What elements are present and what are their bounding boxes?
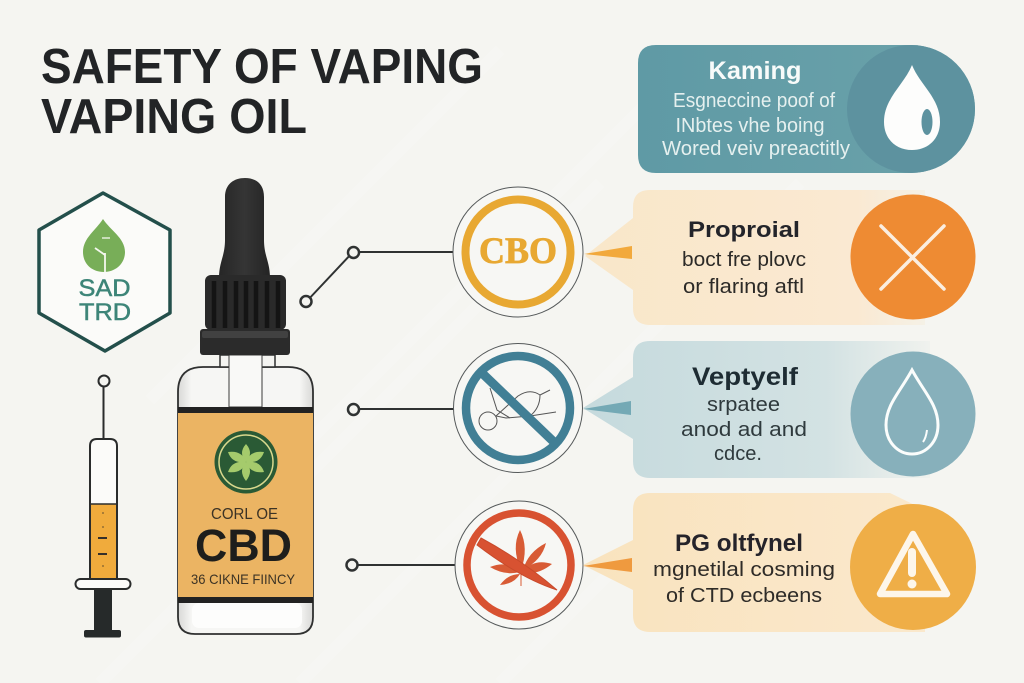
panel: PG oltfynel (583, 493, 976, 632)
title (41, 40, 483, 144)
panel: Veptyelf: Veptyelf (692, 363, 799, 391)
icon: outlined drop (850, 352, 976, 476)
title: VAPING OIL (41, 90, 307, 144)
label: CORL OE (211, 506, 278, 523)
syringe (76, 376, 130, 638)
panel: PG oltfynel: of CTD ecbeens (666, 585, 822, 607)
panel: Kaming: Wored veiv preactitly (662, 138, 850, 160)
panel: Proproial: Proproial (688, 217, 800, 242)
icon: green leaf drop (83, 219, 125, 272)
icon: CBO circle (453, 187, 583, 317)
badge: hexagon SAD TRD: SAD (78, 275, 130, 302)
panel: Kaming: INbtes vhe boing (676, 115, 824, 137)
badge: hexagon SAD TRD: TRD (79, 299, 131, 326)
icon: white drop (847, 45, 975, 173)
panel: PG oltfynel: mgnetilal cosming (653, 559, 835, 581)
title: SAFETY OF VAPING (41, 40, 483, 94)
icon: prohibited cannabis circle (455, 501, 583, 629)
panel: Veptyelf: anod ad and (681, 419, 807, 441)
label: CBD (195, 520, 292, 571)
bottle glass (178, 367, 313, 634)
icon: prohibited vaping circle (454, 344, 582, 472)
dropper bulb (219, 178, 270, 278)
panel: Veptyelf: srpatee (707, 394, 780, 416)
badge: hexagon SAD TRD (39, 193, 170, 351)
panel: Kaming: Kaming (708, 57, 802, 85)
connector: bottle to CBO (300, 247, 453, 307)
panel: Proproial: boct fre plovc (682, 249, 806, 271)
panel: PG oltfynel: PG oltfynel (675, 530, 803, 557)
panel: Proproial: or flaring aftl (683, 276, 804, 298)
panel: Kaming (638, 45, 975, 173)
connector: bottle to no-vape (348, 404, 454, 415)
icon: CBO circle: CBO (479, 231, 557, 272)
panel: Veptyelf: cdce. (714, 443, 762, 465)
panel: Veptyelf (583, 341, 976, 478)
connector: bottle to no-cannabis (346, 560, 455, 570)
icon: leaf logo (214, 430, 278, 494)
panel: Proproial (584, 190, 976, 325)
cap collar (205, 275, 286, 330)
dropper bottle (178, 178, 313, 634)
panel: Kaming: Esgneccine poof of (673, 90, 835, 112)
icon: warning triangle (850, 504, 976, 630)
bottle neck (220, 355, 275, 367)
icon: orange cross (850, 194, 976, 320)
label (178, 407, 313, 603)
label: 36 CIKNE FIINCY (191, 571, 296, 587)
